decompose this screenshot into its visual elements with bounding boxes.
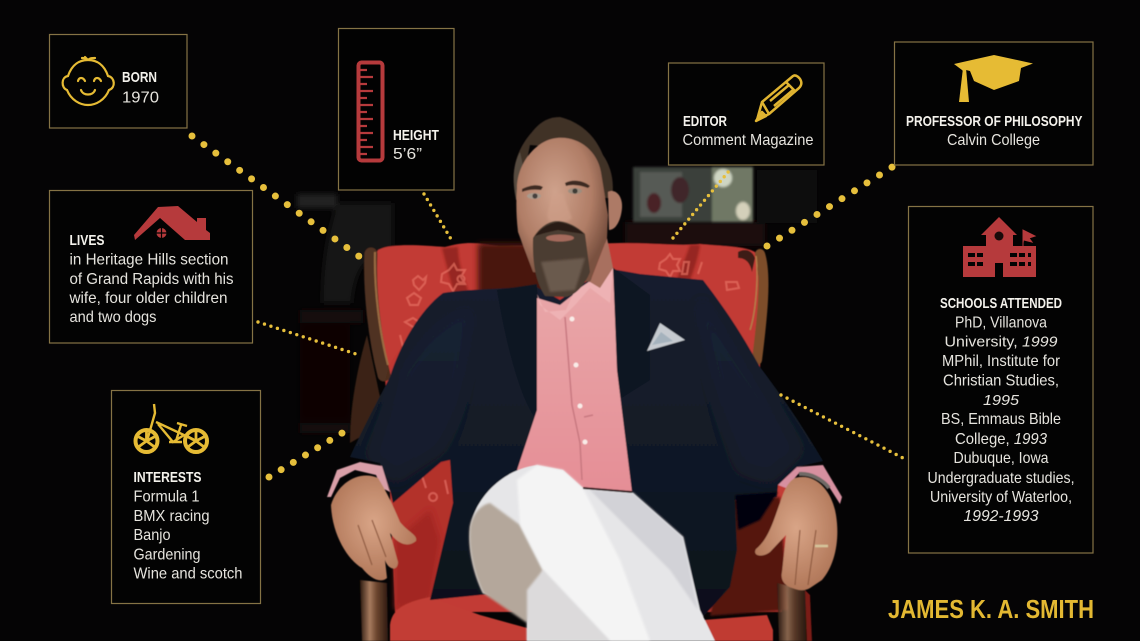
neck (590, 238, 613, 288)
heading: editor: EDITOR (683, 113, 727, 130)
value: comment magazine: Comment Magazine (682, 132, 814, 149)
trousers (470, 465, 715, 641)
list: interests: Formula 1 (134, 488, 200, 506)
body text: schools list: College, 1993 (955, 431, 1047, 448)
icon: baby face (63, 57, 114, 105)
face (516, 138, 608, 282)
body text: lives: of Grand Rapids with his (70, 271, 234, 288)
list: interests (134, 488, 242, 582)
body text: schools list: Christian Studies, (943, 372, 1059, 390)
body text: schools list: PhD, Villanova (955, 314, 1047, 332)
shirt placket (565, 317, 593, 480)
heading: height: HEIGHT (393, 127, 439, 144)
pocket square (647, 323, 685, 351)
chair (350, 243, 812, 641)
body text: schools list: BS, Emmaus Bible (941, 411, 1061, 428)
upholstery pattern (400, 254, 739, 501)
body text: lives: and two dogs (70, 309, 156, 326)
stained glass window (633, 167, 817, 223)
body text: lives: wife, four older children (69, 290, 228, 307)
heading: schools attended: SCHOOLS ATTENDED (940, 295, 1062, 312)
body text: schools list: University of Waterloo, (930, 489, 1072, 506)
panel: lives (50, 190, 252, 343)
value: 5'6": 5’6” (393, 146, 422, 163)
body text: schools list: MPhil, Institute for (942, 353, 1061, 370)
panel: schools attended (908, 206, 1093, 553)
jacket shading (370, 300, 800, 480)
heading: interests: INTERESTS (134, 469, 202, 486)
dotted connector: lives to chair (258, 322, 356, 354)
seat cushion left (390, 597, 527, 641)
icon: school building (963, 217, 1036, 277)
icon: graduation cap (954, 55, 1033, 102)
left cuff (327, 462, 390, 497)
heading: born: BORN (122, 69, 157, 86)
body text: schools list: 1995 (983, 392, 1020, 409)
dotted connector: editor to chair (673, 171, 729, 238)
heading: professor: PROFESSOR OF PHILOSOPHY (906, 113, 1082, 130)
head (514, 117, 622, 297)
list: interests: Wine and scotch (134, 566, 242, 582)
dotted connector: interests to chair (269, 432, 343, 477)
icon: ruler (358, 62, 382, 160)
nose shading (547, 193, 572, 223)
dotted connector: height to chair (424, 194, 451, 239)
body text: schools list: University, 1999 (944, 334, 1058, 350)
panel: interests (112, 390, 260, 604)
seat cushion right (703, 615, 773, 641)
icon: bmx bike (136, 404, 207, 452)
collar (537, 268, 613, 320)
body text: schools list (928, 314, 1074, 525)
chair wood left (350, 252, 388, 443)
list: interests: Banjo (134, 527, 171, 544)
eyes and brows (522, 181, 590, 192)
dotted connector: schools to chair (781, 395, 904, 458)
list: interests: BMX racing (134, 508, 210, 525)
heading: lives: LIVES (70, 232, 104, 249)
body text: lives: in Heritage Hills section (70, 252, 228, 268)
panel: professor (894, 42, 1093, 165)
jacket lapels (497, 284, 540, 420)
watch and ring (799, 474, 829, 546)
chair back (370, 243, 790, 612)
dotted connector: born to chair (192, 136, 360, 257)
hair (514, 117, 613, 198)
beard (533, 221, 590, 297)
lips (546, 234, 574, 242)
jacket (350, 268, 823, 617)
body text: lives (69, 252, 234, 326)
ear (608, 191, 622, 230)
chair inner right side (710, 497, 788, 616)
photo: man seated in a red wing chair (297, 117, 842, 641)
dotted connector: professor to chair (767, 166, 893, 246)
panel: editor (668, 63, 824, 165)
right hand (755, 477, 837, 590)
name caption: JAMES K. A. SMITH (888, 594, 1094, 624)
room background (297, 194, 765, 433)
value: 1970: 1970 (122, 90, 159, 106)
icon: house (134, 206, 210, 240)
chair wood right (738, 250, 763, 360)
right cuff (778, 465, 842, 504)
body text: schools list: 1992-1993 (964, 508, 1039, 525)
shaded thigh (470, 503, 543, 623)
panel: born (50, 34, 187, 128)
shirt (517, 268, 632, 492)
body text: schools list: Undergraduate studies, (928, 470, 1074, 487)
chair inner left side (393, 460, 453, 610)
left hand (331, 476, 416, 580)
list: interests: Gardening (134, 546, 200, 564)
value: calvin college: Calvin College (947, 132, 1040, 149)
shadow behind the head (478, 243, 560, 300)
panel: height (338, 28, 454, 190)
icon: pencil (756, 75, 801, 121)
front arm posts (360, 580, 388, 641)
body text: schools list: Dubuque, Iowa (954, 450, 1049, 467)
